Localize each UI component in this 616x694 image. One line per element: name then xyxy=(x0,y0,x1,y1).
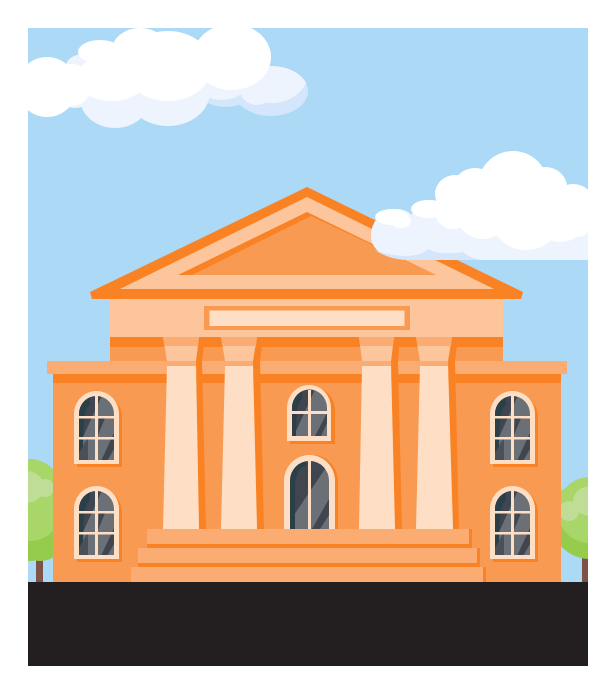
cloud: right xyxy=(371,151,594,260)
tree: left xyxy=(28,459,53,582)
pediment xyxy=(90,187,523,299)
window: lower right xyxy=(490,486,538,562)
window: lower left xyxy=(74,486,122,562)
tree: right xyxy=(561,477,588,582)
building xyxy=(47,187,567,582)
plaque xyxy=(204,306,410,330)
sky background xyxy=(28,28,588,582)
main wall xyxy=(53,374,561,582)
columns xyxy=(163,337,459,529)
ground xyxy=(28,582,588,666)
cloud: top left xyxy=(17,24,310,128)
door xyxy=(284,455,338,529)
column 2 xyxy=(221,337,264,529)
windows xyxy=(74,391,538,562)
column 4 xyxy=(416,337,459,529)
window: upper right xyxy=(490,391,538,467)
cornice xyxy=(47,361,567,383)
upper storey xyxy=(110,298,503,361)
window: centre xyxy=(287,385,335,444)
column 3 xyxy=(359,337,402,529)
window: upper left xyxy=(74,391,122,467)
steps xyxy=(131,529,486,582)
column 1 xyxy=(163,337,206,529)
